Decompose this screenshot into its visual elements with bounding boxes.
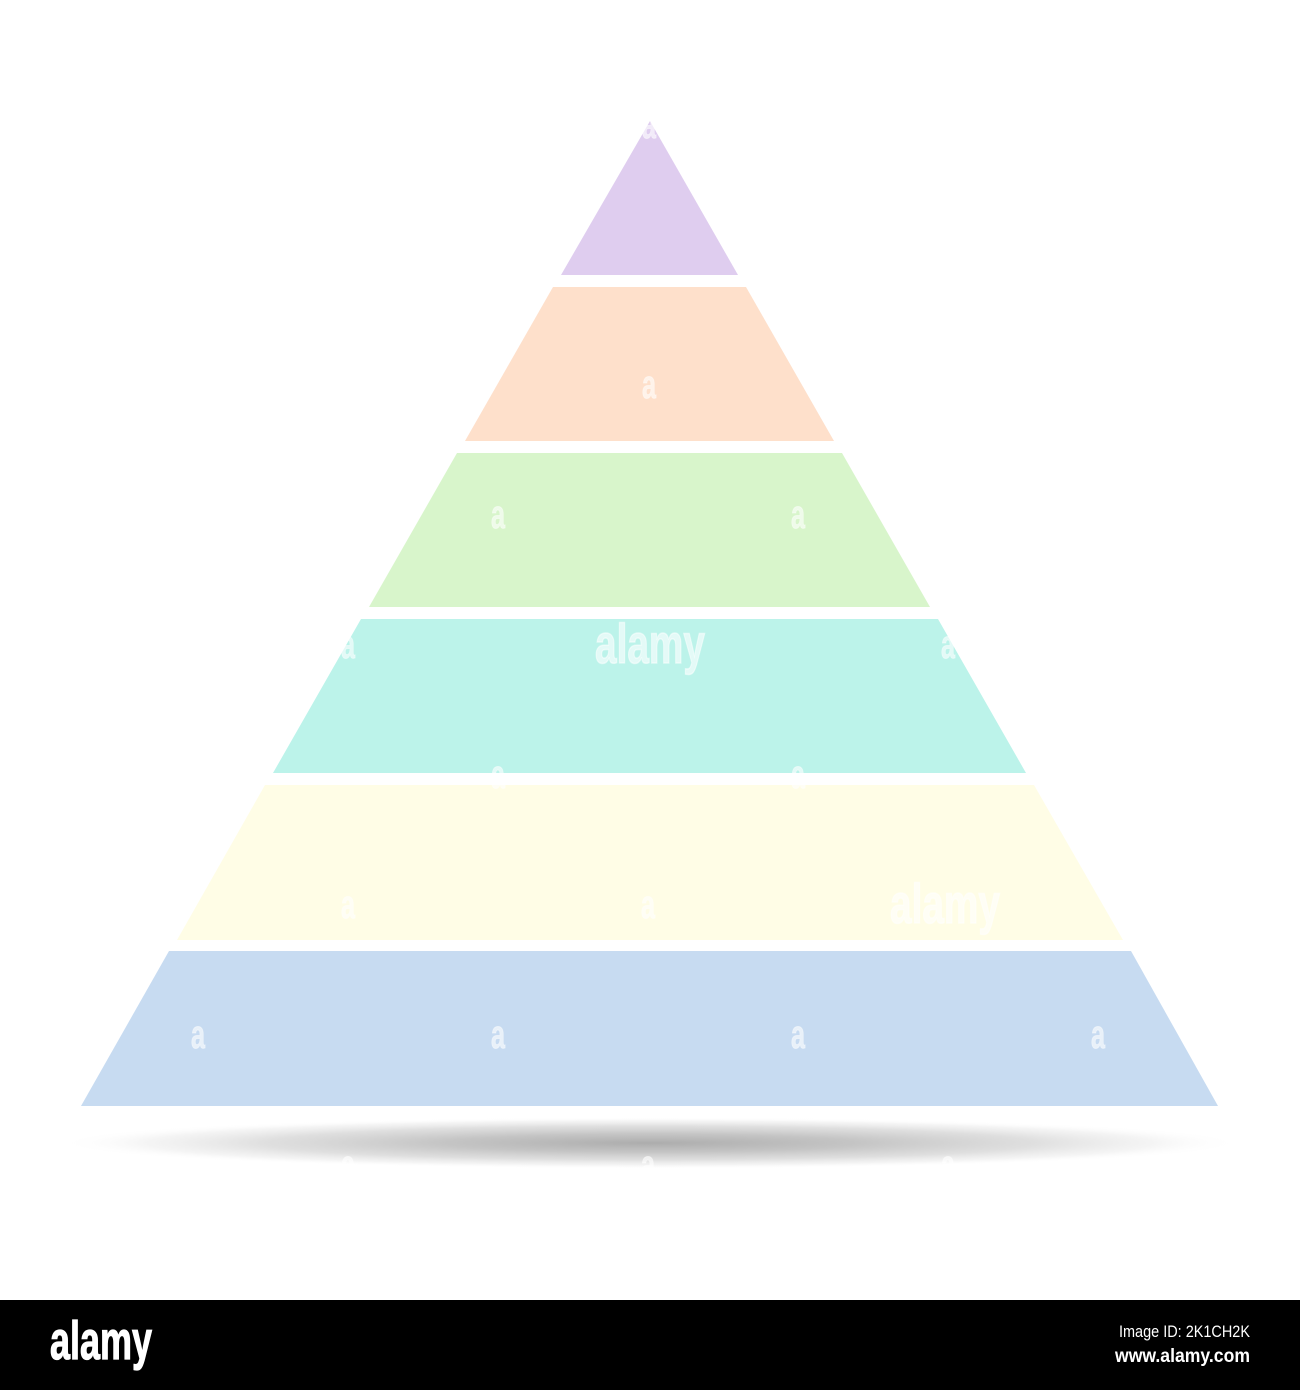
lower right watermark: alamy (890, 872, 1000, 935)
repeated watermark marks: a (791, 493, 805, 537)
repeated watermark marks: a (642, 363, 656, 407)
repeated watermark marks: a (791, 1013, 805, 1057)
repeated watermark marks: a (341, 1143, 355, 1187)
repeated watermark marks: a (1091, 1013, 1105, 1057)
tier 4: aqua (273, 619, 1026, 773)
repeated watermark marks: a (191, 1013, 205, 1057)
repeated watermark marks: a (491, 753, 505, 797)
repeated watermark marks: a (941, 623, 955, 667)
repeated watermark marks (191, 103, 1105, 1187)
repeated watermark marks: a (641, 1143, 655, 1187)
tier 6: blue base (81, 951, 1218, 1106)
footer logo: alamy (50, 1311, 152, 1371)
tier 5: pale yellow (177, 785, 1123, 940)
image id: Image ID: 2K1CH2K (1119, 1322, 1251, 1341)
pyramid (81, 121, 1218, 1106)
tier 1: purple apex (561, 121, 738, 275)
repeated watermark marks: a (941, 1143, 955, 1187)
tier 3: green (369, 453, 930, 607)
repeated watermark marks: a (491, 1013, 505, 1057)
footer bar (0, 1300, 1300, 1390)
center watermark: alamy (595, 612, 705, 675)
repeated watermark marks: a (341, 883, 355, 927)
tier 2: peach (465, 287, 834, 441)
repeated watermark marks: a (642, 103, 656, 147)
repeated watermark marks: a (641, 883, 655, 927)
repeated watermark marks: a (341, 623, 355, 667)
repeated watermark marks: a (791, 753, 805, 797)
website: www.alamy.com (1114, 1346, 1250, 1367)
repeated watermark marks: a (491, 493, 505, 537)
pyramid shadow (58, 1117, 1242, 1169)
